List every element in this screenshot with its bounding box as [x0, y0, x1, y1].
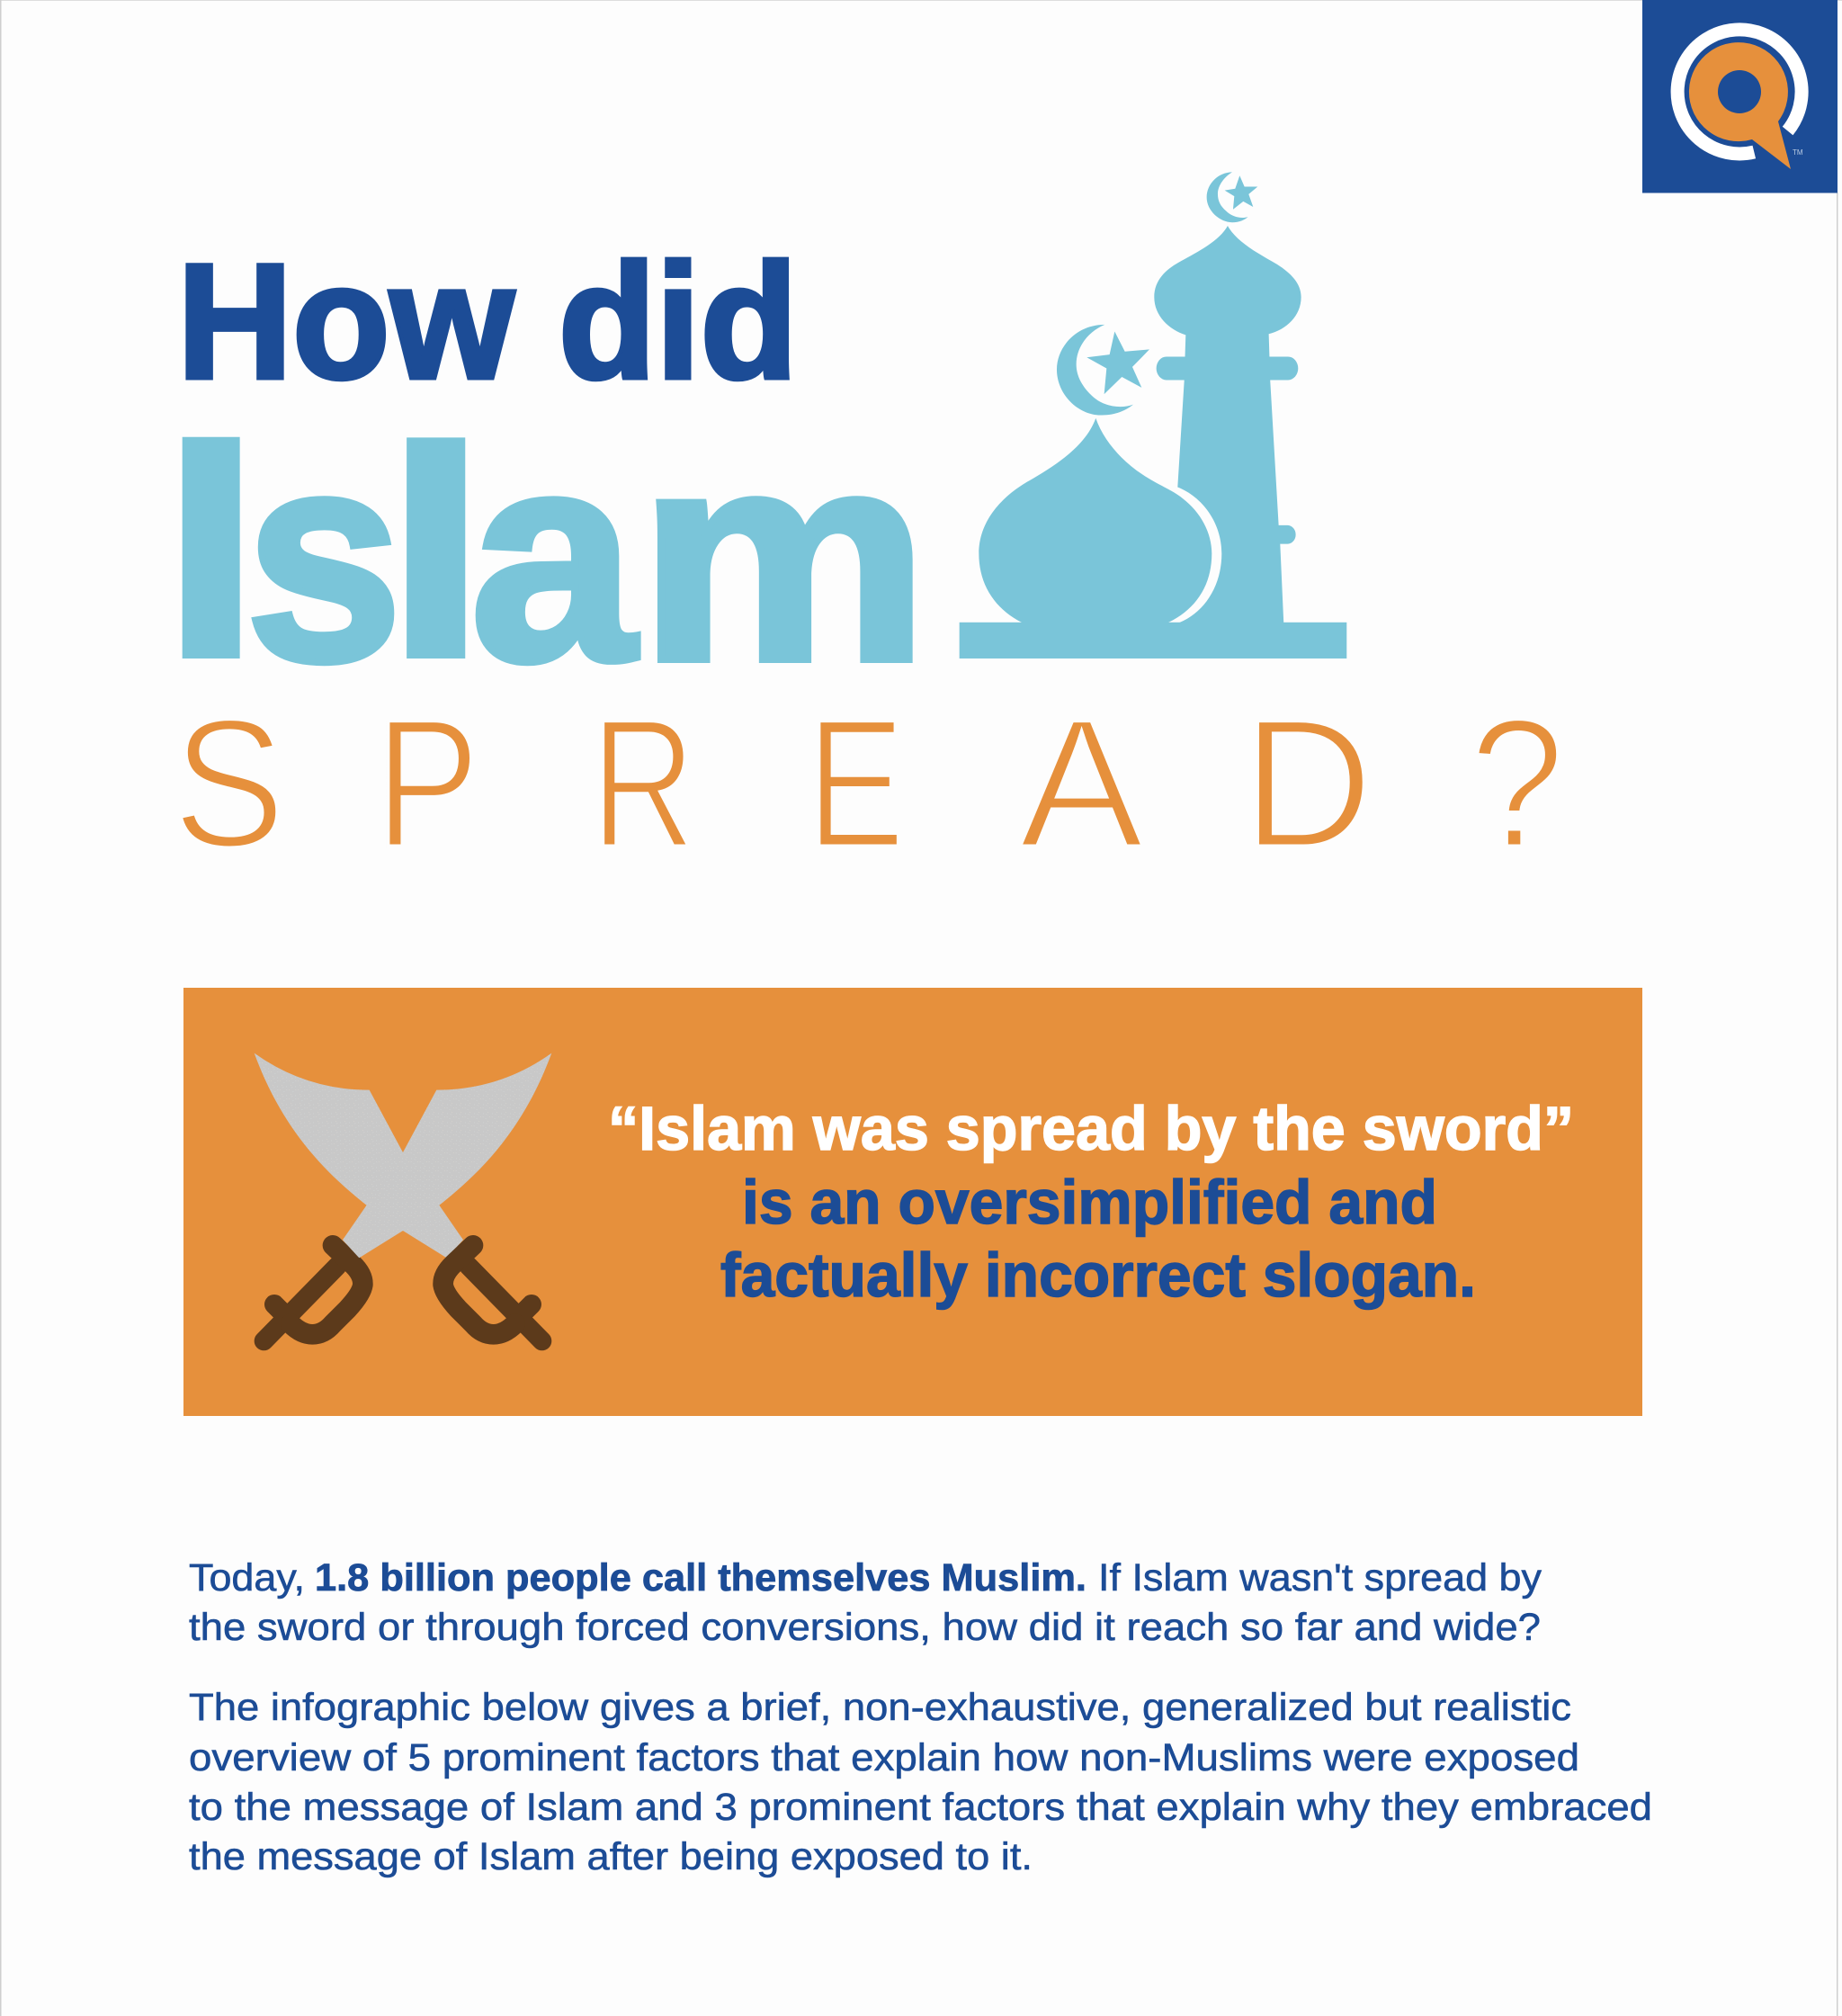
text block: overview paragraph: to the message of Islam and 3 prominent factors that explain why they embraced [189, 1786, 1652, 1829]
text block: overview paragraph: The infographic below gives a brief, non-exhaustive, generalized but realistic [189, 1686, 1571, 1729]
title: Islam: s [246, 392, 402, 723]
text block: intro paragraph: If Islam wasn't spread by [1098, 1556, 1542, 1599]
title: Islam: l [377, 383, 496, 723]
quote line 3: factually incorrect slogan. [720, 1241, 1476, 1310]
title: SPREAD?: ? [1470, 681, 1565, 885]
text block: intro paragraph: Today, [189, 1556, 305, 1599]
title: SPREAD?: S [173, 681, 285, 886]
icon: mosque [960, 172, 1346, 659]
title: Islam: I [156, 368, 266, 727]
title: Islam: a [470, 390, 638, 722]
title: Islam [156, 368, 929, 727]
title: SPREAD?: P [375, 681, 479, 886]
title: SPREAD?: D [1242, 681, 1373, 886]
text block: overview paragraph [189, 1686, 1652, 1878]
title: How did: How did [177, 229, 798, 413]
title: SPREAD? [173, 680, 1565, 886]
icon: crossed swords [255, 1053, 551, 1341]
title: SPREAD?: R [591, 681, 695, 885]
text block: intro paragraph: 1.8 billion people call themselves Muslim. [315, 1556, 1086, 1599]
title: Islam: m [639, 390, 929, 722]
text block: intro paragraph [189, 1556, 1542, 1649]
title: SPREAD?: E [807, 682, 905, 886]
text block: intro paragraph: the sword or through forced conversions, how did it reach so far and wide? [189, 1606, 1541, 1649]
text block: overview paragraph: the message of Islam after being exposed to it. [189, 1835, 1033, 1878]
title: SPREAD?: A [1019, 680, 1144, 886]
logo badge [1642, 0, 1838, 193]
panel: orange quote banner [183, 988, 1642, 1416]
logo badge: TM [1793, 148, 1803, 157]
quote line 1: “Islam was spread by the sword” [608, 1094, 1574, 1163]
text block: overview paragraph: overview of 5 prominent factors that explain how non-Muslims were exposed [189, 1736, 1579, 1779]
quote line 2: is an oversimplified and [742, 1168, 1437, 1237]
